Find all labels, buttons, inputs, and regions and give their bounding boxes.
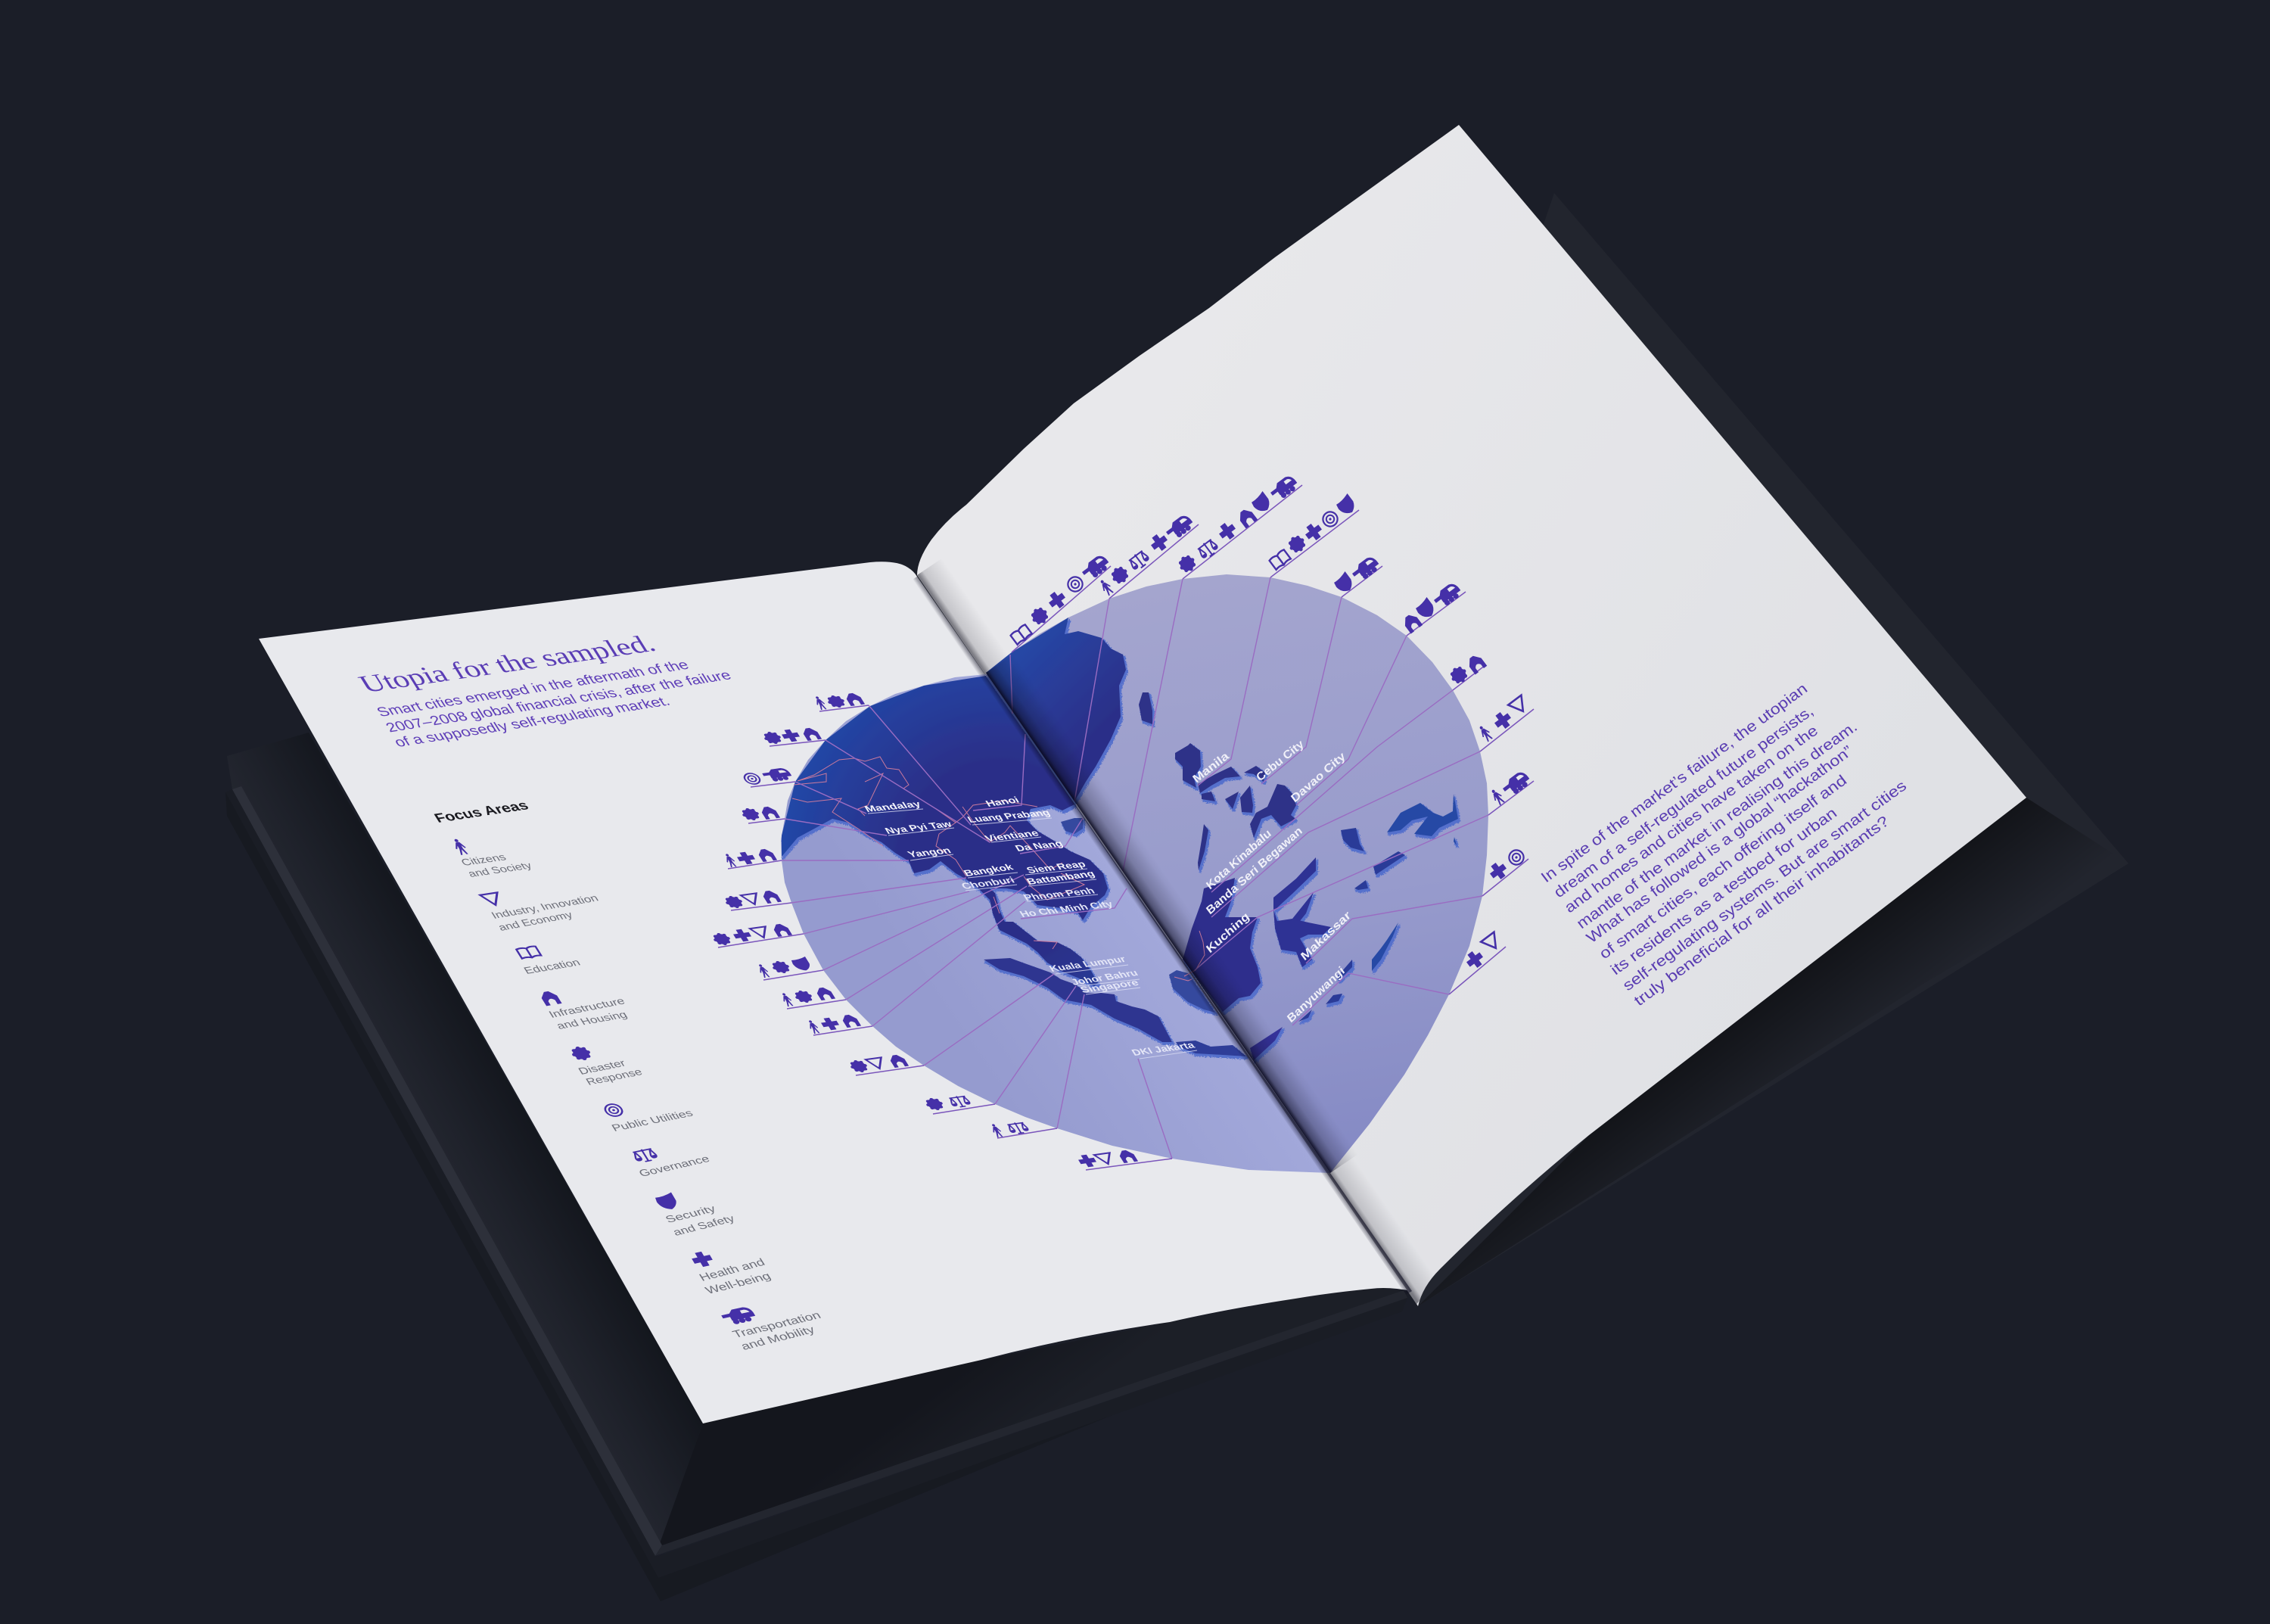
national borders [792, 757, 1205, 981]
right page paragraph: dream of a self-regulated future persists, [1550, 702, 1817, 901]
legend item: education [516, 946, 583, 976]
left page [259, 562, 1412, 1423]
legend item: industry [480, 892, 601, 933]
label: Johor Bahru: Johor Bahru [1068, 967, 1140, 987]
legend item: security and safety: Security [664, 1203, 719, 1225]
legend item: industry: Industry, Innovation [490, 893, 601, 921]
Borneo [1183, 878, 1261, 1012]
row: disaster, infrastructure [1447, 653, 1487, 690]
legend heading: Focus Areas [431, 798, 532, 826]
legend item: citizens and society [450, 838, 535, 879]
row: citizens, health, infrastructure [806, 1014, 872, 1035]
legend item: education: Education [522, 957, 583, 976]
right page paragraph: mantle of the market in realising this dream. [1573, 718, 1861, 932]
row: disaster, governance, health, infrastructure, security, transport [1175, 474, 1302, 579]
row: security, transport [1332, 555, 1382, 597]
label: Singapore: Singapore [1077, 977, 1141, 994]
Taiwan [1139, 692, 1152, 724]
row: health, utilities [1482, 848, 1528, 896]
legend item: health and well-being [689, 1250, 773, 1296]
legend item: governance: Governance [637, 1153, 712, 1179]
land masses on right page [986, 618, 1458, 1060]
legend item: governance [630, 1147, 712, 1179]
label: Mandalay: Mandalay [862, 798, 923, 814]
leader lines from icon rows to cities [782, 577, 1488, 1159]
legend item: transportation and mobility: Transportation [731, 1310, 823, 1340]
label: Luang Prabang: Luang Prabang [965, 807, 1053, 824]
row: citizens, disaster, infrastructure [813, 692, 869, 711]
right page paragraph: What has followed is a global “hackathon” [1583, 742, 1856, 947]
right page paragraph [1538, 680, 1910, 1010]
New Guinea and Timor [1372, 794, 1458, 971]
legend: focus areas [431, 798, 823, 1352]
row: disaster, infrastructure [739, 806, 785, 823]
intro text block: of a supposedly self-regulating market. [391, 694, 673, 750]
legend item: health and well-being: Well-being [704, 1271, 773, 1296]
legend item: transportation and mobility [720, 1306, 823, 1352]
legend item: disaster response: Disaster [577, 1059, 628, 1077]
legend item: infrastructure: Infrastructure [547, 996, 627, 1020]
row: disaster, health, industry, infrastructure [710, 923, 804, 947]
Borneo west sliver [1169, 970, 1215, 1013]
heart map: left page half [781, 674, 1330, 1173]
China coast [986, 618, 1126, 801]
right page paragraph: truly beneficial for all their inhabitants? [1631, 813, 1892, 1010]
spine shadow [911, 556, 1443, 1306]
icon rows around right half of map [1010, 474, 1534, 994]
label: Bangkok: Bangkok [961, 862, 1015, 878]
row: citizens, governance [989, 1122, 1057, 1138]
row: citizens, transport [1488, 770, 1534, 815]
row: citizens, disaster, security [756, 957, 823, 980]
city labels: left page [862, 795, 1197, 1059]
row: citizens, disaster, infrastructure [779, 987, 846, 1009]
label: Siem Reap: Siem Reap [1024, 859, 1088, 875]
label: Banda Seri Begawan: Banda Seri Begawan [1204, 824, 1304, 917]
legend item: infrastructure: and Housing [555, 1010, 630, 1031]
label: Da Nang: Da Nang [1012, 838, 1065, 853]
legend item: disaster response: Response [584, 1067, 645, 1087]
label: Makassar: Makassar [1298, 908, 1353, 963]
right page paragraph: its residents as a testbed for urban [1607, 804, 1840, 978]
legend item: transportation and mobility: and Mobility [739, 1324, 817, 1352]
label: Yangon: Yangon [905, 845, 953, 859]
label: Manila: Manila [1190, 749, 1232, 786]
open booklet mockup scene [226, 125, 2054, 1556]
mainland and peninsula [782, 676, 1108, 986]
label: Nya Pyi Taw: Nya Pyi Taw [882, 819, 954, 835]
right page [917, 125, 2026, 1306]
left cover and page stack [225, 733, 1408, 1601]
row: health, industry, infrastructure [1076, 1150, 1172, 1170]
label: Ho Chi Minh City: Ho Chi Minh City [1017, 898, 1115, 919]
Hainan [1061, 818, 1083, 834]
label: Phnom Penh: Phnom Penh [1021, 885, 1097, 902]
right page paragraph: In spite of the market’s failure, the utopian [1538, 680, 1811, 886]
label: Kuala Lumpur: Kuala Lumpur [1046, 954, 1128, 973]
city labels: right page [1190, 737, 1353, 1025]
legend item: disaster response [568, 1045, 645, 1087]
label: Banyuwangi: Banyuwangi [1285, 964, 1347, 1025]
Java [1176, 1041, 1246, 1056]
legend item: citizens and society: and Society [466, 860, 535, 879]
row: utilities, transport [742, 767, 795, 787]
row: education, disaster, health, utilities, transport [1010, 553, 1112, 652]
row: citizens, disaster, governance, health, transport [1098, 513, 1199, 599]
right page paragraph: of smart cities, each offering itself and [1596, 772, 1850, 963]
legend item: public utilities: Public Utilities [610, 1109, 695, 1134]
row: disaster, industry, infrastructure [722, 890, 791, 910]
legend item: citizens and society: Citizens [459, 852, 508, 868]
heart map: right page half [986, 574, 1488, 1173]
label: Hanoi: Hanoi [983, 795, 1022, 808]
right page paragraph: self-regulating systems. But are smart cities [1619, 777, 1910, 994]
icon rows around left half of map [710, 692, 1172, 1170]
row: infrastructure, security, transport [1401, 581, 1466, 636]
label: DKI Jakarta: DKI Jakarta [1129, 1040, 1197, 1057]
eastern islands [1298, 828, 1405, 1022]
label: Vientiane: Vientiane [982, 828, 1041, 843]
label: Davao City: Davao City [1289, 749, 1348, 805]
row: citizens, health, industry [1477, 695, 1534, 751]
legend item: public utilities [602, 1103, 695, 1134]
intro text block: 2007–2008 global financial crisis, after the failure [383, 668, 735, 736]
row: disaster, governance [922, 1095, 995, 1114]
intro text block: Smart cities emerged in the aftermath of the [374, 658, 692, 720]
legend item: security and safety: and Safety [671, 1213, 738, 1238]
label: Cebu City: Cebu City [1254, 737, 1306, 784]
right back cover [1362, 193, 2129, 1306]
row: education, disaster, health, utilities, security [1269, 493, 1359, 577]
legend item: security and safety [653, 1193, 738, 1238]
label: Chonburi: Chonburi [959, 875, 1017, 891]
row: citizens, health, infrastructure [723, 848, 782, 869]
label: Battambang: Battambang [1024, 868, 1097, 886]
Sulawesi [1273, 857, 1331, 967]
Sumatra [984, 958, 1172, 1042]
label: Kota Kinabalu: Kota Kinabalu [1204, 826, 1273, 892]
legend item: infrastructure [538, 991, 630, 1031]
land masses on left page [782, 676, 1246, 1056]
title: Utopia for the sampled. [354, 630, 661, 698]
right page paragraph: and homes and cities have taken on the [1561, 722, 1821, 916]
Philippines [1175, 743, 1296, 870]
Java east [1250, 1027, 1283, 1060]
legend item: industry: and Economy [496, 910, 576, 933]
row: health, industry [1449, 932, 1506, 994]
row: disaster, industry, infrastructure [847, 1054, 924, 1075]
label: Kuching: Kuching [1204, 910, 1252, 956]
row: disaster, health, infrastructure [760, 727, 826, 746]
legend item: health and well-being: Health and [698, 1257, 767, 1283]
intro text block [374, 658, 735, 750]
